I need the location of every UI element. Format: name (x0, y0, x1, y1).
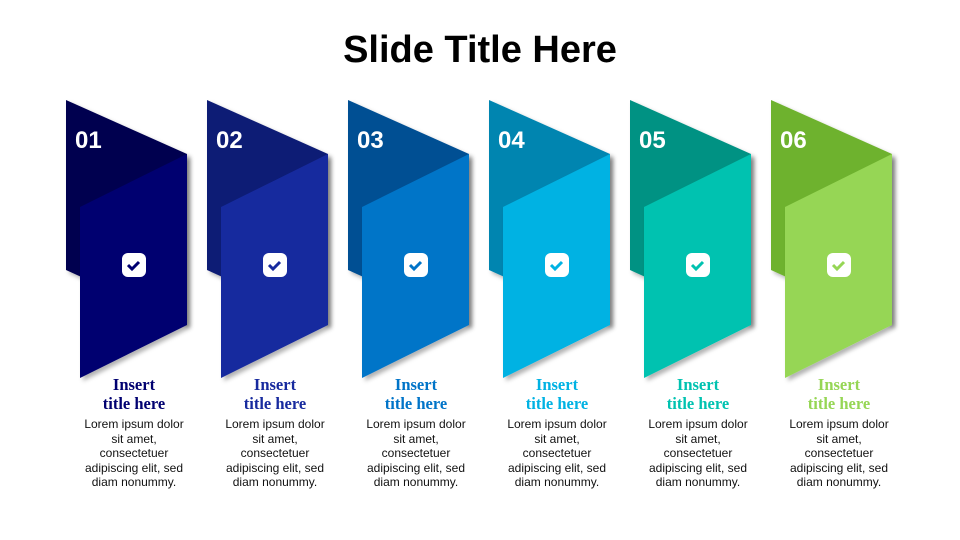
caption 04 (507, 375, 607, 489)
caption 06: Insert (818, 375, 860, 394)
caption 04: consectetuer (523, 446, 591, 460)
caption 02: Lorem ipsum dolor (225, 417, 325, 431)
caption 02: adipiscing elit, sed (226, 460, 324, 474)
caption 02 (225, 375, 325, 489)
caption 04: Insert (536, 375, 578, 394)
panel 03: 03 (357, 127, 384, 154)
panel 04: 04 (498, 127, 525, 154)
caption 01: Lorem ipsum dolor (84, 417, 184, 431)
caption 02: title here (244, 394, 306, 413)
caption 04: sit amet, (534, 432, 580, 446)
caption 05: title here (667, 394, 729, 413)
caption 01: sit amet, (111, 432, 157, 446)
caption 05: consectetuer (664, 446, 732, 460)
caption 03: Insert (395, 375, 437, 394)
caption 03: sit amet, (393, 432, 439, 446)
caption 06: consectetuer (805, 446, 873, 460)
caption 05: sit amet, (675, 432, 721, 446)
caption 04: diam nonummy. (515, 475, 599, 489)
caption 04: adipiscing elit, sed (508, 460, 606, 474)
caption 05: adipiscing elit, sed (649, 460, 747, 474)
panel 05 (630, 100, 751, 378)
caption 01: Insert (113, 375, 155, 394)
caption 02: diam nonummy. (233, 475, 317, 489)
caption 01: diam nonummy. (92, 475, 176, 489)
caption 04: title here (526, 394, 588, 413)
caption 02: Insert (254, 375, 296, 394)
panel 04 (489, 100, 610, 378)
panel 03 (348, 100, 469, 378)
caption 03: consectetuer (382, 446, 450, 460)
caption 02: consectetuer (241, 446, 309, 460)
caption 03: title here (385, 394, 447, 413)
caption 05: Lorem ipsum dolor (648, 417, 748, 431)
caption 03: diam nonummy. (374, 475, 458, 489)
caption 06: sit amet, (816, 432, 862, 446)
caption 05: diam nonummy. (656, 475, 740, 489)
title: Slide Title Here (343, 29, 617, 71)
caption 03 (366, 375, 466, 489)
caption 06: title here (808, 394, 870, 413)
caption 06 (789, 375, 889, 489)
caption 06: diam nonummy. (797, 475, 881, 489)
caption 01: title here (103, 394, 165, 413)
caption 02: sit amet, (252, 432, 298, 446)
panel 06 (771, 100, 892, 378)
caption 03: Lorem ipsum dolor (366, 417, 466, 431)
caption 01: adipiscing elit, sed (85, 460, 183, 474)
panel 06: 06 (780, 127, 807, 154)
caption 05 (648, 375, 748, 489)
caption 04: Lorem ipsum dolor (507, 417, 607, 431)
caption 05: Insert (677, 375, 719, 394)
panel 05: 05 (639, 127, 666, 154)
caption 06: adipiscing elit, sed (790, 460, 888, 474)
panel 02: 02 (216, 127, 243, 154)
panel 01 (66, 100, 187, 378)
caption 03: adipiscing elit, sed (367, 460, 465, 474)
caption 01: consectetuer (100, 446, 168, 460)
panel 02 (207, 100, 328, 378)
caption 01 (84, 375, 184, 489)
panel 01: 01 (75, 127, 102, 154)
caption 06: Lorem ipsum dolor (789, 417, 889, 431)
